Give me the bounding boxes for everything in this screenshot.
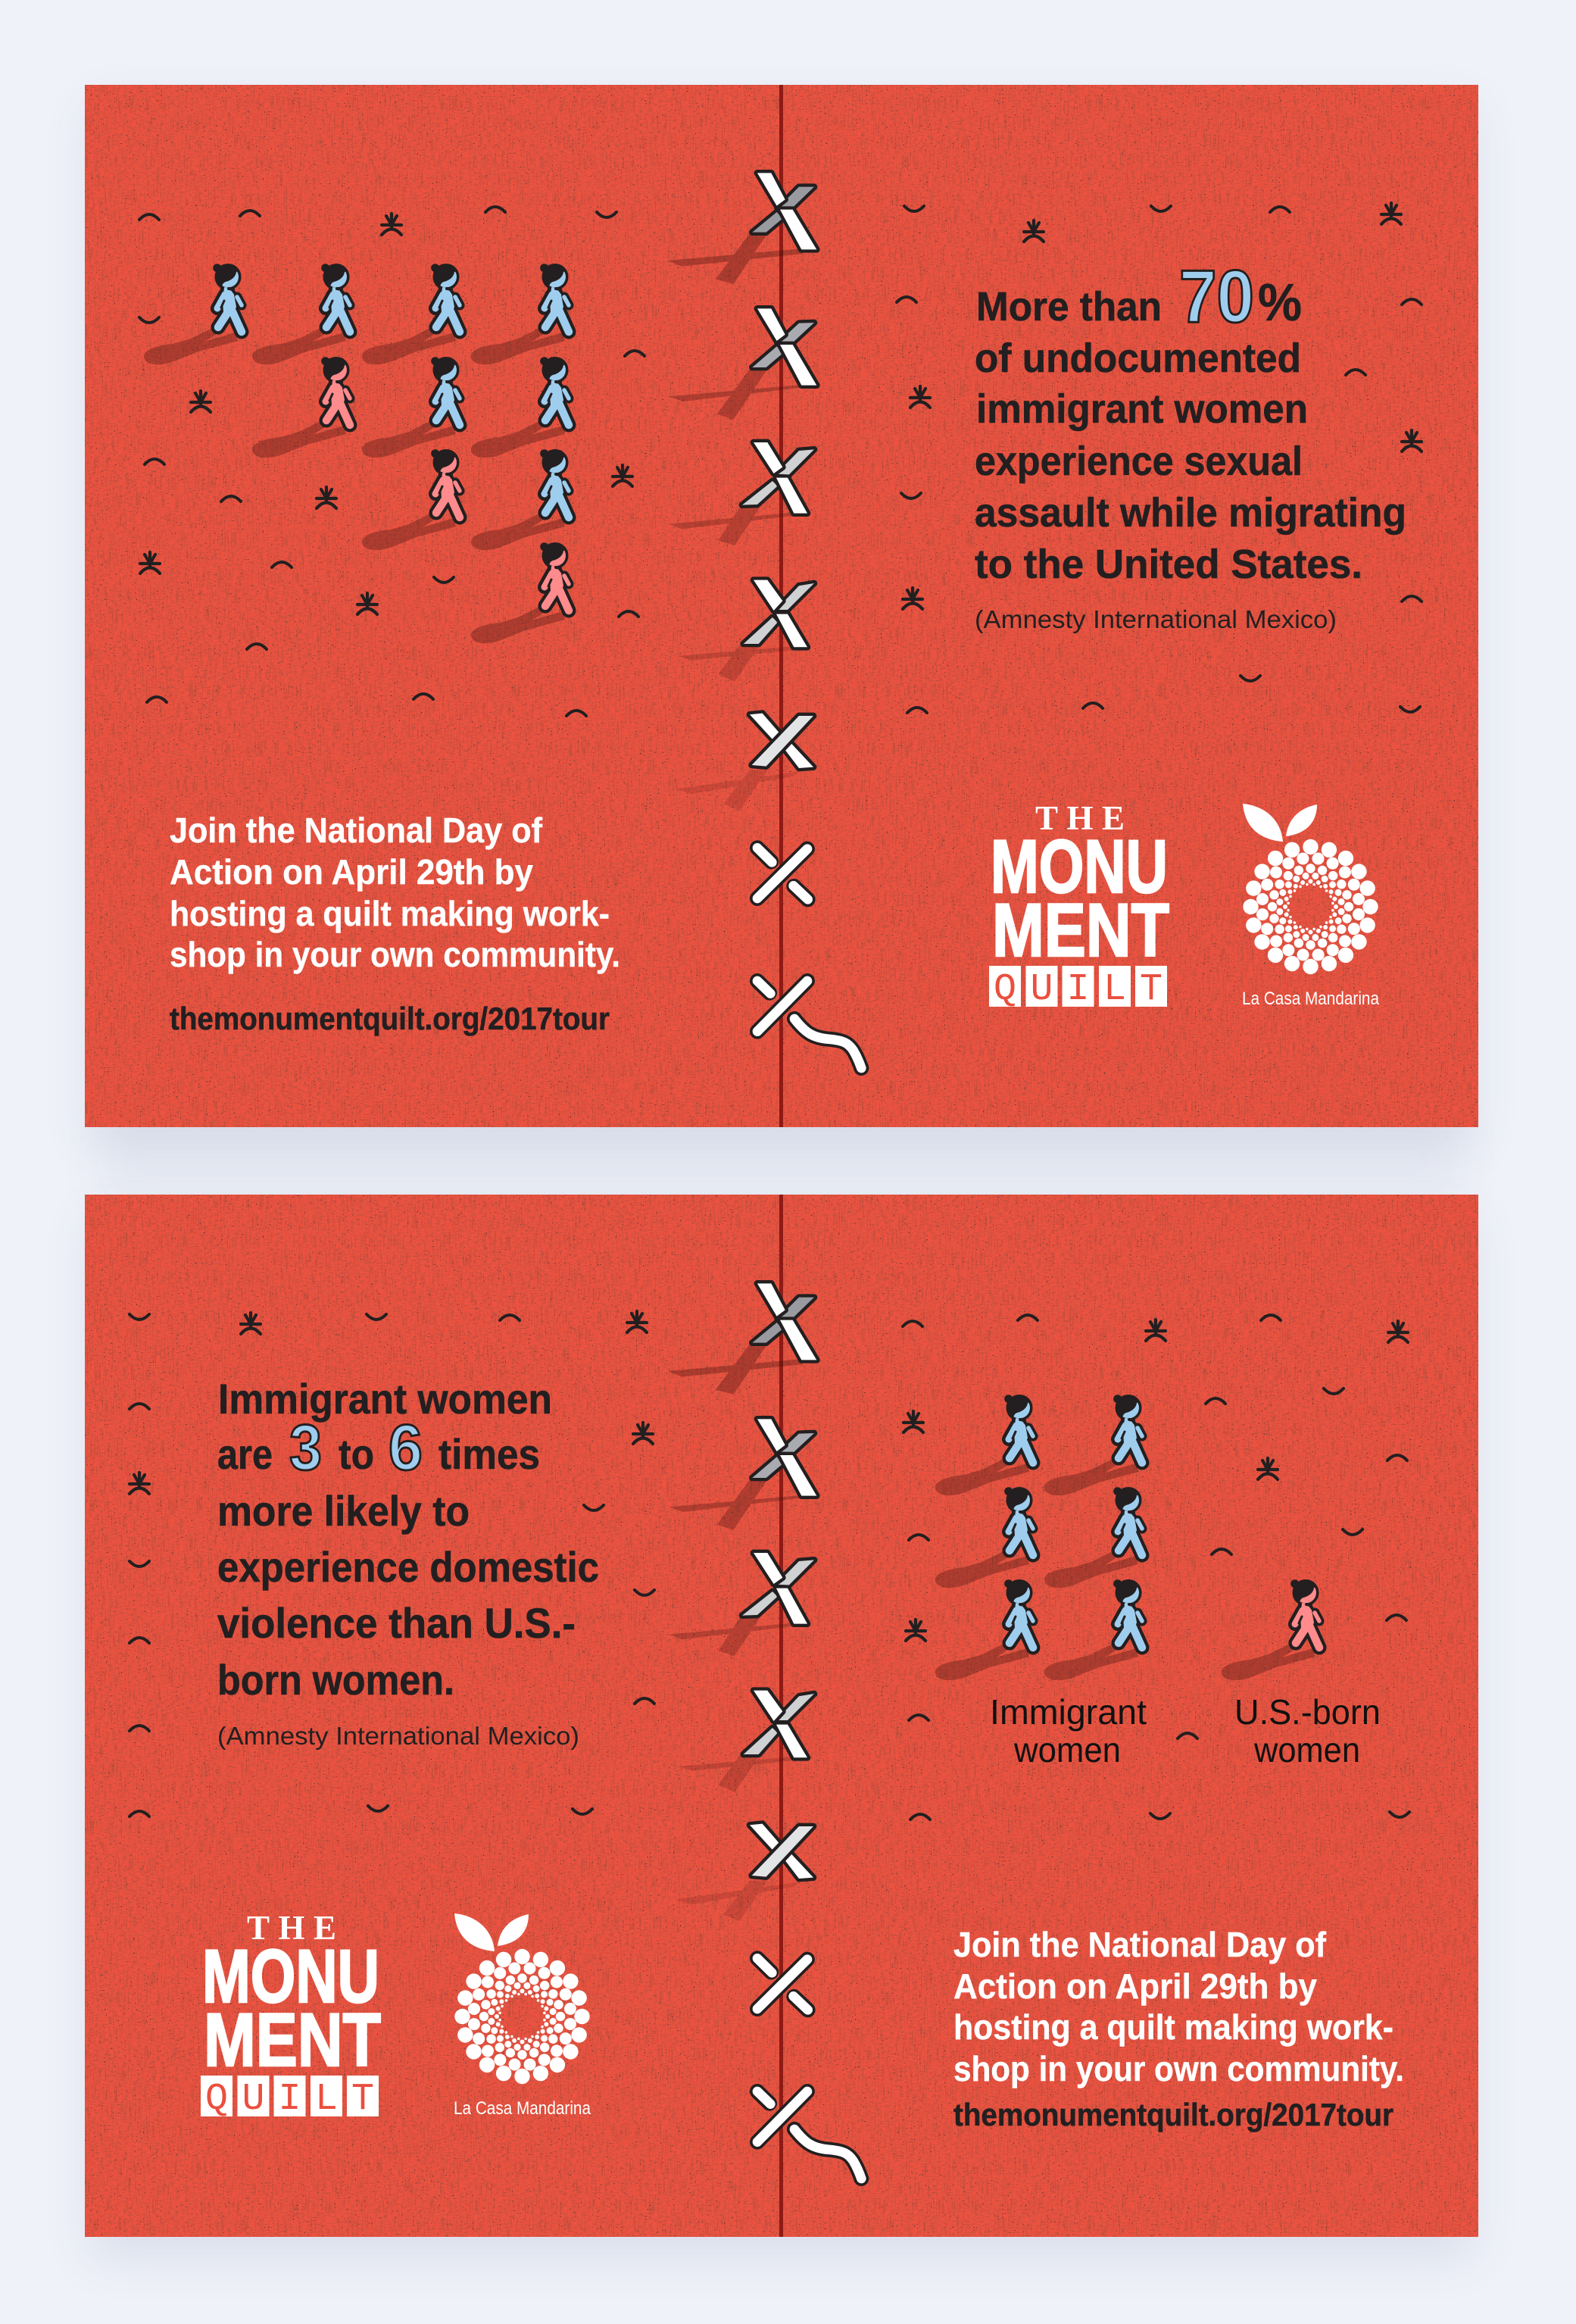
label: immigrant women: Immigrant	[990, 1692, 1147, 1732]
statistic text: 3 to 6 times: violence than U.S.-	[217, 1599, 576, 1647]
logo: The Monument Quilt	[201, 1909, 381, 2121]
label: U.S.-born women	[1234, 1692, 1381, 1770]
statistic text: 3 to 6 times: experience domestic	[217, 1543, 599, 1591]
label: U.S.-born women: women	[1253, 1730, 1360, 1770]
statistic text: 3 to 6 times: 6	[389, 1412, 423, 1484]
statistic text: 3 to 6 times: are	[217, 1430, 273, 1478]
statistic text: 3 to 6 times: born women.	[217, 1656, 454, 1704]
call to action: Action on April 29th by	[170, 852, 533, 892]
panel: bottom card	[85, 1195, 1478, 2237]
website url: themonumentquilt.org/2017tour	[953, 2097, 1393, 2132]
logo: The Monument Quilt: Q	[994, 968, 1016, 1011]
logo: The Monument Quilt: L	[315, 2078, 338, 2121]
logo: The Monument Quilt: T	[351, 2078, 374, 2121]
logo: The Monument Quilt: I	[278, 2078, 301, 2121]
call to action: hosting a quilt making work-	[170, 894, 610, 933]
statistic text: 3 to 6 times: Immigrant women	[218, 1375, 552, 1423]
source citation: (Amnesty International Mexico)	[217, 1722, 579, 1750]
logo: The Monument Quilt: THE	[247, 1909, 336, 1947]
logo: La Casa Mandarina: La Casa Mandarina	[1242, 989, 1380, 1009]
label: immigrant women: women	[1013, 1730, 1121, 1770]
logo: The Monument Quilt: MONU	[202, 1934, 379, 2018]
statistic text: 70 percent	[975, 255, 1406, 587]
call to action: shop in your own community.	[953, 2049, 1404, 2088]
website url: themonumentquilt.org/2017tour	[170, 1001, 610, 1036]
label: U.S.-born women: U.S.-born	[1234, 1692, 1381, 1732]
statistic text: 3 to 6 times: 3	[289, 1412, 322, 1484]
panel: top card	[85, 85, 1478, 1127]
statistic text: 70 percent: assault while migrating	[975, 490, 1406, 536]
stitched seam	[668, 173, 861, 1068]
call to action: shop in your own community.	[170, 935, 620, 974]
decorative marks right	[897, 203, 1422, 713]
decorative marks right	[903, 1315, 1409, 1820]
logo: La Casa Mandarina	[454, 1913, 591, 2119]
logo: The Monument Quilt: L	[1103, 968, 1126, 1011]
logo: The Monument Quilt: MONU	[991, 824, 1168, 908]
decorative marks left	[130, 1311, 654, 1816]
call to action	[953, 1925, 1404, 2088]
logo: The Monument Quilt: I	[1066, 968, 1090, 1011]
logo: The Monument Quilt: U	[242, 2078, 265, 2121]
statistic text: 70 percent: to the United States.	[975, 542, 1362, 587]
statistic text: 70 percent: immigrant women	[976, 386, 1308, 432]
statistic text: 3 to 6 times: more likely to	[217, 1487, 470, 1535]
logo: The Monument Quilt: MENT	[992, 888, 1169, 972]
call to action: Join the National Day of	[953, 1925, 1327, 1964]
statistic text: 70 percent: experience sexual	[975, 439, 1303, 484]
logo: The Monument Quilt	[989, 799, 1169, 1011]
stitched seam	[668, 1283, 861, 2179]
logo: The Monument Quilt: Q	[205, 2078, 228, 2121]
statistic text: 70 percent: More than	[976, 284, 1162, 330]
logo: La Casa Mandarina: La Casa Mandarina	[454, 2098, 591, 2119]
statistic text: 3 to 6 times: to	[339, 1430, 374, 1478]
call to action: Action on April 29th by	[953, 1966, 1317, 2006]
logo: La Casa Mandarina	[1242, 804, 1380, 1009]
call to action: hosting a quilt making work-	[953, 2007, 1393, 2047]
logo: The Monument Quilt: U	[1030, 968, 1053, 1011]
call to action	[170, 811, 620, 974]
statistic text: 70 percent: 70	[1179, 255, 1254, 338]
label: immigrant women	[990, 1692, 1147, 1770]
call to action: Join the National Day of	[170, 811, 543, 850]
decorative marks left	[139, 207, 644, 716]
pictogram: six immigrant women versus one U.S.-born woman	[935, 1395, 1319, 1680]
logo: The Monument Quilt: MENT	[204, 1998, 381, 2082]
pictogram: ten walking women, seven blue and three pink	[144, 264, 569, 643]
statistic text: 3 to 6 times: times	[438, 1430, 540, 1478]
source citation: (Amnesty International Mexico)	[975, 605, 1337, 633]
statistic text: 70 percent: of undocumented	[975, 336, 1301, 381]
logo: The Monument Quilt: T	[1140, 968, 1162, 1011]
statistic text: 70 percent: %	[1258, 273, 1302, 332]
statistic text: 3 to 6 times	[217, 1375, 599, 1704]
logo: The Monument Quilt: THE	[1035, 799, 1125, 837]
